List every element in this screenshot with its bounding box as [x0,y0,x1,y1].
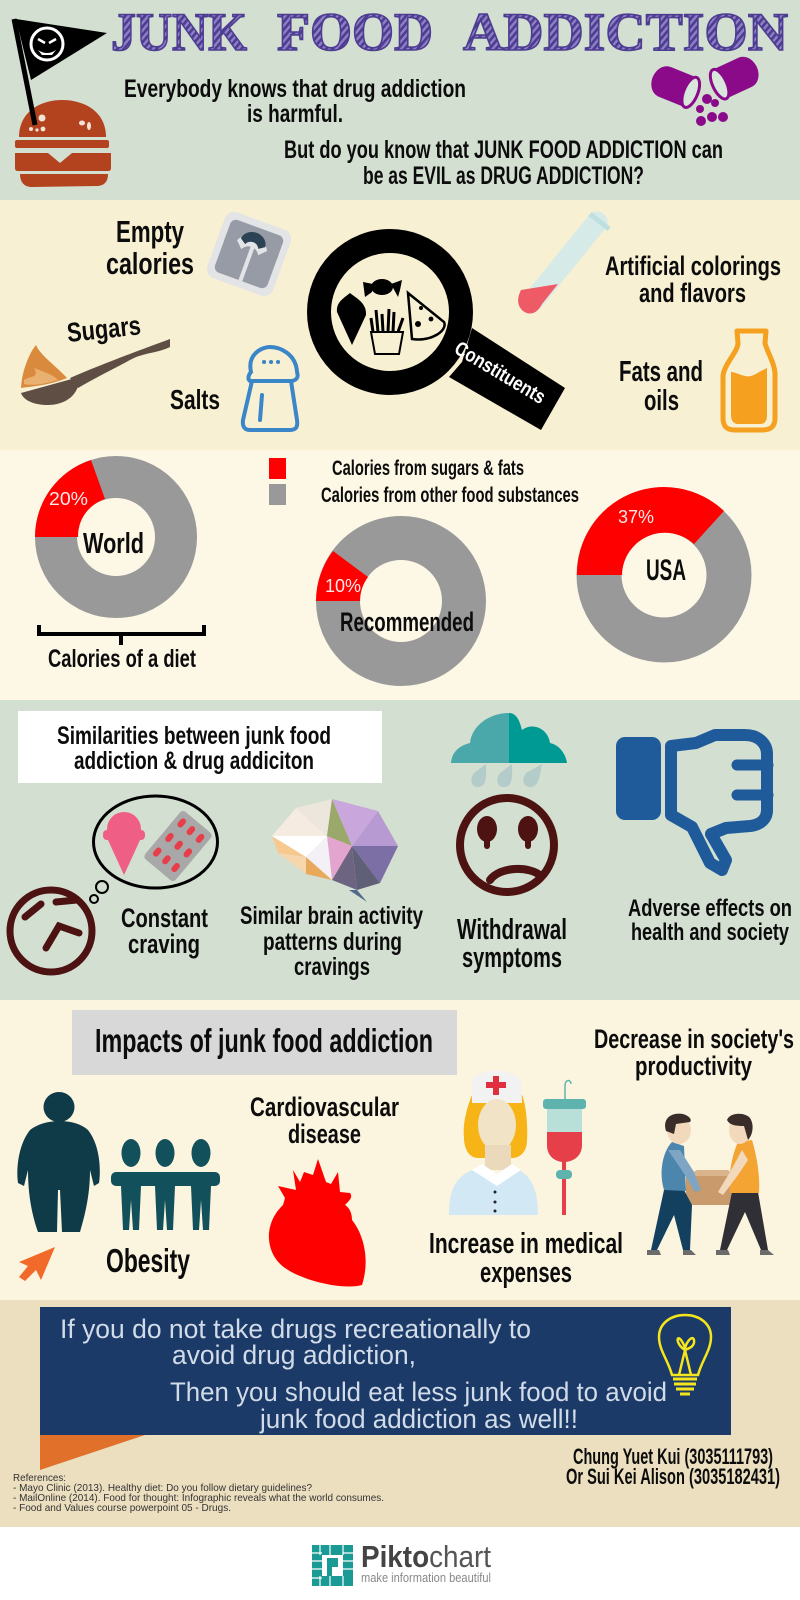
icon: nurse [449,1071,538,1215]
label: constituents: Constituents [450,337,549,409]
label: empty calories: Empty [116,214,185,249]
references: - MailOnline (2014). Food for thought: Infographic reveals what the world consumes. [13,1492,384,1504]
label: cardiovascular disease: Cardiovascular [250,1092,399,1122]
icon: spoon with peanut butter [21,339,170,405]
magnifying glass [319,241,565,430]
label: fats and oils [619,356,703,417]
authors [566,1444,780,1489]
arrow [19,1247,55,1281]
banner: Then you should eat less junk food to avoid [170,1377,667,1407]
title: JUNK [111,2,247,62]
label: medical expenses: Increase in medical [429,1228,623,1260]
icon: heart [269,1159,366,1286]
icon: craving face [10,890,92,972]
icon: pizza [408,293,445,339]
icon: light bulb [659,1315,711,1394]
donut: recommended 10% [316,538,474,664]
icon: thumbs down [616,735,768,870]
label: adverse effects [628,895,792,946]
donut: world 20% [35,460,176,597]
text: junk food question [284,136,723,190]
donut: recommended 10%: Recommended [340,607,474,637]
label: similar brain activity [240,902,423,981]
references: References: [13,1472,66,1484]
label: withdrawal symptoms [457,914,567,974]
icon: test tube [518,214,609,314]
text: drug addiction statement: is harmful. [247,100,343,128]
panel: calorie charts [0,450,800,700]
heading: similarities: addiction & drug addiciton [74,747,314,775]
icon: sad face [460,798,554,892]
legend [269,457,579,507]
label: similar brain activity: patterns during [263,928,402,956]
panel: similarities [0,700,800,1000]
heading: similarities [18,711,382,783]
label: medical expenses [429,1228,623,1289]
legend: Calories from sugars & fats [332,457,524,480]
banner: avoid drug addiction, [172,1340,416,1370]
label: obesity: Obesity [106,1242,190,1279]
label: similar brain activity: Similar brain activity [240,902,423,930]
icon: candy [363,279,402,297]
label: empty calories [106,214,194,281]
icon: IV drip [543,1080,586,1215]
label: productivity [594,1024,794,1081]
label: withdrawal symptoms: Withdrawal [457,914,567,946]
banner: junk food addiction as well!! [259,1404,578,1434]
panel: impacts [0,1000,800,1300]
text: drug addiction statement: Everybody knows that drug addiction [124,75,466,103]
legend: Calories from other food substances [321,484,579,507]
panel: conclusion [0,1300,800,1527]
label: similar brain activity: cravings [294,953,370,981]
label: cardiovascular disease: disease [288,1119,361,1149]
label: empty calories: calories [106,246,194,281]
icon: oil bottle [723,331,775,430]
heading: similarities: Similarities between junk food [57,722,331,750]
label: fats and oils: Fats and [619,356,703,388]
title [111,2,788,62]
label: withdrawal symptoms: symptoms [462,942,562,974]
heading: impacts [72,1010,457,1075]
icon: ice cream [337,293,366,345]
donut: world 20%: World [83,528,144,560]
icon: Piktochart mark [312,1545,353,1586]
title: ADDICTION [463,2,788,62]
label: constant craving: craving [128,929,200,959]
label: productivity: productivity [635,1051,752,1081]
references [13,1472,384,1514]
donut: USA 37%: 37% [618,507,654,527]
label: fats and oils: oils [644,385,679,417]
label: artificial colorings: and flavors [639,278,746,308]
donut: USA 37%: USA [646,554,686,587]
icon: obese person [17,1092,100,1232]
label: cardiovascular disease [250,1092,399,1149]
banner [40,1307,731,1435]
icon: brain [272,799,398,902]
text: drug addiction statement [124,75,466,128]
label: medical expenses: expenses [480,1257,572,1289]
ribbon fold [40,1435,145,1470]
banner: If you do not take drugs recreationally to [60,1314,531,1344]
bracket: calories of a diet [39,625,204,673]
label: artificial colorings [605,251,781,308]
footer: Piktochart logo [0,1527,800,1600]
tagline: make information beautiful [361,1571,491,1585]
icon: workers carrying a box [647,1114,774,1255]
label: constant craving: Constant [121,903,208,933]
icon: salt shaker [243,347,298,430]
panel: constituents [0,200,800,450]
icon: pills [647,52,764,126]
label: salts: Salts [170,384,220,415]
donut: USA 37% [577,487,729,640]
icon: rain cloud [451,713,567,787]
label: sugars: Sugars [65,310,142,348]
icon: weighing scale [204,209,294,299]
icon: pirate flag [14,19,107,125]
label: constant craving [121,903,208,959]
bracket: calories of a diet: Calories of a diet [48,645,196,673]
wordmark: Piktochart [361,1539,491,1574]
panel: introduction [0,0,800,200]
text: junk food question: be as EVIL as DRUG ADDICTION? [363,162,644,190]
icon: thought bubble [90,796,218,903]
icon: burger [15,100,111,187]
references: - Food and Values course powerpoint 05 - Drugs. [13,1502,231,1514]
icon: fries [371,309,403,354]
donut: recommended 10%: 10% [325,576,361,596]
donut: world 20%: 20% [49,489,88,509]
icon: three people [111,1139,220,1230]
heading: impacts: Impacts of junk food addiction [95,1022,433,1059]
references: - Mayo Clinic (2013). Healthy diet: Do you follow dietary guidelines? [13,1482,312,1494]
title: FOOD [277,2,433,62]
